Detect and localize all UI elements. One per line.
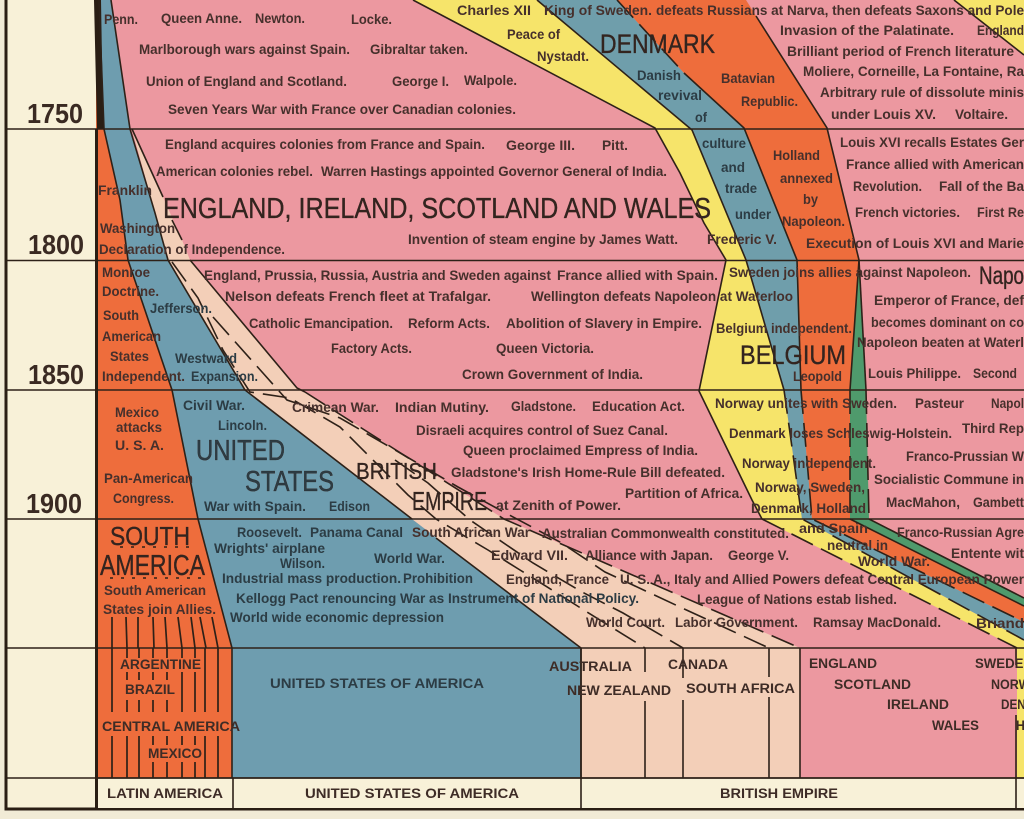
- events 1700 to 1750: Queen Anne.: [161, 10, 242, 26]
- events 1700 to 1750: Peace of: [507, 26, 560, 42]
- events 1700 to 1750: Danish: [637, 67, 681, 83]
- region: Holland orange band: [617, 0, 1024, 622]
- present-day nations row: SOUTH AFRICA: [686, 681, 795, 696]
- events 1900 to 1930: World Court.: [586, 614, 665, 630]
- events 1800 to 1850: American: [102, 328, 161, 344]
- events 1750 to 1800: Execution of Louis XVI and Marie: [806, 235, 1024, 251]
- region: United States blue band: [99, 0, 581, 778]
- region: British Empire peach band: [132, 129, 800, 778]
- events 1750 to 1800: [98, 134, 1024, 257]
- events 1850 to 1900: MacMahon,: [886, 494, 960, 510]
- events 1800 to 1850: Monroe: [102, 264, 150, 280]
- events 1800 to 1850: South: [103, 307, 139, 323]
- events 1700 to 1750: George I.: [392, 73, 449, 89]
- present-day nations row: [102, 656, 1024, 761]
- heading: Belgium: BELGIUM: [740, 340, 846, 370]
- events 1800 to 1850: Nelson defeats French fleet at Trafalgar.: [225, 288, 491, 304]
- events 1700 to 1750: Gibraltar taken.: [370, 41, 468, 57]
- present-day nations row: MEXICO: [148, 746, 202, 761]
- present-day nations row: IRELAND: [887, 697, 949, 712]
- events 1700 to 1750: Voltaire.: [955, 106, 1008, 122]
- events 1700 to 1750: Newton.: [255, 10, 305, 26]
- events 1850 to 1900: Gladstone.: [511, 398, 576, 414]
- events 1750 to 1800: culture: [702, 135, 746, 151]
- events 1800 to 1850: Sweden joins allies against Napoleon.: [729, 264, 971, 280]
- events 1900 to 1930: neutral in: [827, 537, 888, 553]
- events 1850 to 1900: Denmark loses Schleswig-Holstein.: [729, 425, 952, 441]
- events 1900 to 1930: World War.: [858, 553, 930, 569]
- events 1850 to 1900: Denmark, Holland: [751, 500, 866, 516]
- events 1750 to 1800: Revolution.: [853, 178, 922, 194]
- events 1900 to 1930: Roosevelt.: [237, 524, 302, 540]
- events 1850 to 1900: Norway unites with Sweden.: [715, 395, 897, 411]
- events 1700 to 1750: revival: [658, 87, 702, 103]
- events 1900 to 1930: [100, 520, 1024, 631]
- events 1750 to 1800: Pitt.: [602, 137, 628, 153]
- events 1700 to 1750: King of Sweden.: [544, 2, 652, 18]
- present-day nations row: UNITED STATES OF AMERICA: [270, 676, 484, 691]
- year labels: 1900: [26, 488, 82, 519]
- events 1850 to 1900: Edison: [329, 498, 370, 514]
- events 1800 to 1850: Jefferson.: [150, 300, 212, 316]
- events 1900 to 1930: South African War: [412, 524, 531, 540]
- heading: England, Ireland, Scotland and Wales: ENGLAND, IRELAND, SCOTLAND AND WALES: [163, 193, 711, 225]
- region: Belgium green band: [850, 260, 1024, 606]
- events 1900 to 1930: Entente wit: [951, 545, 1024, 561]
- events 1900 to 1930: Australian Commonwealth constituted.: [542, 525, 789, 541]
- year labels: 1800: [28, 229, 84, 260]
- events 1850 to 1900: Education Act.: [592, 398, 685, 414]
- events 1900 to 1930: Prohibition: [403, 570, 473, 586]
- events 1700 to 1750: Seven Years War with France over Canadian colonies.: [168, 101, 516, 117]
- events 1750 to 1800: French victories.: [855, 204, 960, 220]
- events 1800 to 1850: Leopold: [793, 368, 842, 384]
- events 1750 to 1800: American colonies rebel.: [156, 163, 313, 179]
- events 1700 to 1750: of: [695, 109, 707, 125]
- heading: United States: STATES: [245, 466, 334, 498]
- events 1850 to 1900: U. S. A.: [115, 437, 164, 453]
- events 1800 to 1850: Westward: [175, 350, 237, 366]
- year labels: 1750: [27, 98, 83, 129]
- events 1800 to 1850: States: [110, 348, 149, 364]
- events 1850 to 1900: [104, 395, 1024, 516]
- region: Sweden yellow band: [413, 0, 1024, 778]
- events 1700 to 1750: Charles XII: [457, 2, 531, 18]
- events 1750 to 1800: Invention of steam engine by James Watt.: [408, 231, 678, 247]
- events 1850 to 1900: Mexico: [115, 404, 159, 420]
- events 1850 to 1900: War with Spain.: [204, 498, 306, 514]
- events 1900 to 1930: World War.: [374, 550, 445, 566]
- events 1700 to 1750: Penn.: [104, 11, 138, 27]
- events 1800 to 1850: Emperor of France, def: [874, 292, 1024, 308]
- events 1800 to 1850: England, Prussia, Russia, Austria and Sweden against: [204, 267, 551, 283]
- events 1700 to 1750: [104, 2, 1024, 125]
- events 1750 to 1800: Washington: [100, 220, 175, 236]
- year labels: 1850: [28, 359, 84, 390]
- events 1750 to 1800: by: [803, 191, 818, 207]
- events 1700 to 1750: Marlborough wars against Spain.: [139, 41, 350, 57]
- events 1700 to 1750: Republic.: [741, 93, 798, 109]
- events 1850 to 1900: at Zenith of Power.: [496, 497, 621, 513]
- events 1800 to 1850: Expansion.: [191, 368, 258, 384]
- region: Denmark blue band: [537, 0, 1024, 640]
- events 1700 to 1750: Batavian: [721, 70, 775, 86]
- heading: Denmark: DENMARK: [600, 29, 715, 59]
- events 1800 to 1850: Factory Acts.: [331, 340, 412, 356]
- region: Latin America orange band: [96, 0, 232, 778]
- events 1700 to 1750: Union of England and Scotland.: [146, 73, 347, 89]
- heading: South America: AMERICA: [100, 550, 206, 582]
- events 1900 to 1930: Wilson.: [280, 555, 325, 571]
- events 1850 to 1900: Congress.: [113, 490, 174, 506]
- events 1850 to 1900: attacks: [116, 419, 162, 435]
- heading: United States: UNITED: [196, 435, 285, 467]
- events 1800 to 1850: Reform Acts.: [408, 315, 490, 331]
- events 1800 to 1850: Second: [973, 365, 1017, 381]
- events 1900 to 1930: George V.: [728, 547, 789, 563]
- events 1750 to 1800: Declaration of Independence.: [99, 241, 285, 257]
- events 1700 to 1750: Brilliant period of French literature: [787, 43, 1014, 59]
- events 1900 to 1930: Wrights' airplane: [214, 540, 325, 556]
- events 1850 to 1900: Pan-American: [104, 470, 193, 486]
- events 1700 to 1750: Nystadt.: [537, 48, 589, 64]
- events 1750 to 1800: Franklin: [98, 182, 152, 198]
- events 1700 to 1750: Locke.: [351, 11, 392, 27]
- events 1700 to 1750: Invasion of the Palatinate.: [780, 22, 954, 38]
- events 1850 to 1900: Queen proclaimed Empress of India.: [463, 442, 698, 458]
- heading: South America: SOUTH: [110, 521, 190, 551]
- events 1750 to 1800: under: [735, 206, 772, 222]
- events 1750 to 1800: and: [721, 159, 745, 175]
- bottom column labels: LATIN AMERICA: [107, 786, 223, 801]
- events 1700 to 1750: Walpole.: [464, 72, 517, 88]
- region: Sweden yellow corner: [954, 0, 1024, 55]
- heading: British Empire: BRITISH: [356, 458, 437, 484]
- events 1900 to 1930: Briand: [976, 615, 1024, 631]
- present-day nations row: ARGENTINE: [120, 657, 201, 672]
- present-day nations row: AUSTRALIA: [549, 659, 632, 674]
- events 1900 to 1930: World wide economic depression: [230, 609, 444, 625]
- heading: British Empire: [356, 458, 487, 516]
- events 1900 to 1930: England, France: [506, 571, 609, 587]
- present-day nations row: SCOTLAND: [834, 677, 911, 692]
- events 1800 to 1850: Belgium independent.: [716, 320, 852, 336]
- heading: British Empire: EMPIRE: [412, 486, 487, 516]
- events 1900 to 1930: Alliance with Japan.: [585, 547, 713, 563]
- events 1850 to 1900: Lincoln.: [218, 417, 267, 433]
- events 1900 to 1930: Edward VII.: [491, 547, 568, 563]
- events 1800 to 1850: Queen Victoria.: [496, 340, 594, 356]
- events 1800 to 1850: Catholic Emancipation.: [249, 315, 393, 331]
- events 1750 to 1800: George III.: [506, 137, 575, 153]
- events 1900 to 1930: Labor Government.: [675, 614, 798, 630]
- events 1700 to 1750: under Louis XV.: [831, 106, 936, 122]
- events 1900 to 1930: States join Allies.: [103, 601, 216, 617]
- events 1900 to 1930: League of Nations estab lished.: [697, 591, 897, 607]
- bottom column labels: UNITED STATES OF AMERICA: [305, 786, 519, 801]
- heading: United States: [196, 435, 334, 498]
- events 1800 to 1850: Wellington defeats Napoleon at Waterloo: [531, 288, 793, 304]
- events 1900 to 1930: and Spain: [799, 520, 868, 536]
- events 1750 to 1800: annexed: [780, 170, 833, 186]
- events 1900 to 1930: Industrial mass production.: [222, 570, 401, 586]
- heading: South America: [100, 521, 206, 582]
- events 1850 to 1900: Norway, Sweden,: [755, 479, 865, 495]
- year labels: [26, 98, 84, 519]
- events 1800 to 1850: Independent.: [102, 368, 185, 384]
- events 1800 to 1850: [102, 262, 1024, 384]
- events 1850 to 1900: Disraeli acquires control of Suez Canal.: [416, 422, 668, 438]
- present-day nations row: CENTRAL AMERICA: [102, 719, 240, 734]
- events 1800 to 1850: Abolition of Slavery in Empire.: [506, 315, 702, 331]
- events 1850 to 1900: Pasteur: [915, 395, 965, 411]
- events 1750 to 1800: Holland: [773, 147, 820, 163]
- events 1900 to 1930: Kellogg Pact renouncing War as Instrument of National Policy.: [236, 590, 639, 606]
- events 1900 to 1930: Ramsay MacDonald.: [813, 614, 941, 630]
- events 1800 to 1850: Louis Philippe.: [868, 365, 961, 381]
- events 1750 to 1800: Warren Hastings appointed Governor General of India.: [321, 163, 667, 179]
- events 1850 to 1900: Crimean War.: [292, 399, 379, 415]
- events 1850 to 1900: Partition of Africa.: [625, 485, 743, 501]
- events 1850 to 1900: Civil War.: [183, 397, 245, 413]
- events 1800 to 1850: Doctrine.: [102, 283, 159, 299]
- present-day nations row: NEW ZEALAND: [567, 683, 671, 698]
- events 1850 to 1900: Indian Mutiny.: [395, 399, 489, 415]
- present-day nations row: ENGLAND: [809, 656, 877, 671]
- events 1850 to 1900: Gladstone's Irish Home-Rule Bill defeated.: [451, 464, 725, 480]
- present-day nations row: WALES: [932, 718, 979, 733]
- events 1800 to 1850: France allied with Spain.: [557, 267, 718, 283]
- bottom column labels: [107, 786, 838, 801]
- events 1750 to 1800: Frederic V.: [707, 231, 777, 247]
- events 1850 to 1900: Norway independent.: [742, 455, 876, 471]
- events 1750 to 1800: England acquires colonies from France and Spain.: [165, 136, 485, 152]
- events 1900 to 1930: Panama Canal: [310, 524, 403, 540]
- events 1750 to 1800: Napoleon.: [782, 213, 845, 229]
- events 1750 to 1800: trade: [725, 180, 757, 196]
- events 1800 to 1850: Crown Government of India.: [462, 366, 643, 382]
- present-day nations row: CANADA: [668, 657, 728, 672]
- bottom column labels: BRITISH EMPIRE: [720, 786, 838, 801]
- year margin column: [6, 0, 96, 809]
- events 1900 to 1930: South American: [104, 582, 206, 598]
- present-day nations row: BRAZIL: [125, 682, 175, 697]
